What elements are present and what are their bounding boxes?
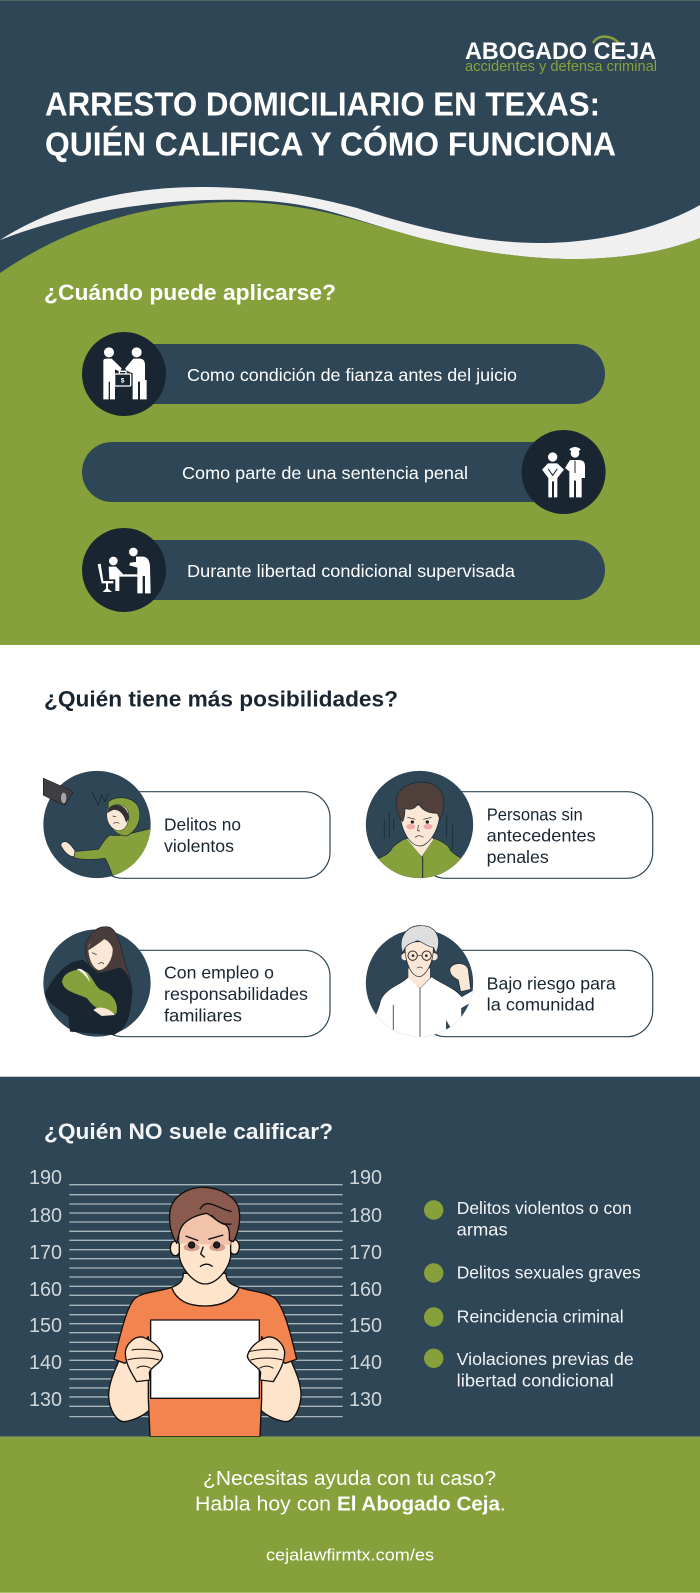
height chart scale right: 160 [349, 1279, 382, 1301]
bullet: probation violations: Violaciones previas de [457, 1349, 634, 1369]
pill: supervised release: Durante libertad condicional supervisada [187, 561, 515, 581]
card text: violentos [164, 836, 234, 856]
panel: who is more likely [43, 687, 653, 1038]
height chart scale right: 150 [349, 1315, 382, 1337]
card: low community risk [363, 926, 653, 1038]
heading: who is more likely: ¿Quién tiene más posibilidades? [44, 687, 398, 712]
height chart scale right: 130 [349, 1389, 382, 1411]
illustration: worried young man [366, 771, 473, 880]
footer call line [195, 1494, 506, 1516]
card text: penales [487, 847, 549, 867]
footer question: ¿Necesitas ayuda con tu caso? [203, 1468, 496, 1490]
panel: call to action footer [0, 1437, 700, 1593]
icon: meeting at a desk [98, 548, 151, 593]
height chart scale right: 140 [349, 1352, 382, 1374]
card: no criminal record [366, 771, 653, 880]
heading: when: ¿Cuándo puede aplicarse? [44, 280, 336, 305]
logo: accidentes y defensa criminal [465, 59, 657, 75]
pill: sentence [82, 430, 606, 514]
title: ARRESTO DOMICILIARIO EN TEXAS: [45, 86, 600, 123]
card text [164, 815, 241, 856]
pill: sentence: Como parte de una sentencia penal [182, 463, 468, 483]
title: QUIÉN CALIFICA Y CÓMO FUNCIONA [45, 126, 616, 163]
pill: bail condition [82, 332, 605, 416]
height chart scale left: 160 [29, 1279, 62, 1301]
title [45, 86, 616, 163]
panel: header [0, 0, 700, 300]
icon: handing over money: $ [121, 378, 125, 385]
height chart scale right: 170 [349, 1242, 382, 1264]
card text: Delitos no [164, 815, 241, 835]
illustration: woman holding child [43, 927, 151, 1037]
logo [465, 37, 657, 75]
footer call line: Habla hoy con [195, 1494, 331, 1516]
height chart scale left: 170 [29, 1242, 62, 1264]
card text: la comunidad [487, 995, 595, 1015]
height chart scale left: 130 [29, 1389, 62, 1411]
illustration: man holding blank sign [109, 1187, 301, 1437]
icon: handing over money [103, 347, 147, 399]
height chart scale right: 180 [349, 1205, 382, 1227]
height chart scale right [349, 1167, 382, 1411]
height chart scale left: 140 [29, 1352, 62, 1374]
card text [164, 962, 308, 1026]
height chart scale left: 190 [29, 1167, 62, 1189]
panel: when it applies [0, 202, 700, 645]
website: cejalawfirmtx.com/es [266, 1546, 434, 1565]
pill: bail condition: Como condición de fianza antes del juicio [187, 365, 517, 385]
white wave band [0, 187, 700, 259]
list: disqualifying factors [424, 1198, 641, 1391]
bullet: probation violations: libertad condicional [457, 1371, 614, 1391]
bullet: violent offences: armas [457, 1220, 508, 1240]
card: employment or family [43, 927, 330, 1037]
card text: responsabilidades [164, 984, 308, 1004]
footer call line: El Abogado Ceja [337, 1494, 501, 1516]
card text [487, 805, 596, 867]
bullet: sexual offences: Delitos sexuales graves [457, 1263, 641, 1283]
bullet: recidivism: Reincidencia criminal [457, 1306, 624, 1326]
bullet: probation violations [424, 1349, 634, 1391]
height chart scale left [29, 1167, 62, 1411]
height chart scale right: 190 [349, 1167, 382, 1189]
icon: prisoner and officer [542, 447, 585, 497]
height chart scale left: 150 [29, 1315, 62, 1337]
bullet: violent offences: Delitos violentos o con [457, 1198, 632, 1218]
footer call line: . [500, 1494, 506, 1516]
card text: familiares [164, 1006, 242, 1026]
logo: ABOGADO CEJA [465, 38, 656, 65]
card: non-violent offences [43, 771, 330, 878]
panel: who does not qualify [0, 1077, 700, 1437]
card text: Con empleo o [164, 962, 274, 982]
card text: antecedentes [487, 826, 596, 846]
bullet: violent offences [424, 1198, 632, 1240]
pill: supervised release [82, 528, 605, 612]
card text: Bajo riesgo para [487, 973, 616, 993]
illustration: older man with glasses [363, 926, 473, 1038]
height chart scale left: 180 [29, 1205, 62, 1227]
card text: Personas sin [487, 805, 583, 825]
illustration: hooded figure and camera [43, 771, 152, 878]
card text [487, 973, 616, 1015]
heading: who does not qualify: ¿Quién NO suele calificar? [44, 1119, 333, 1144]
